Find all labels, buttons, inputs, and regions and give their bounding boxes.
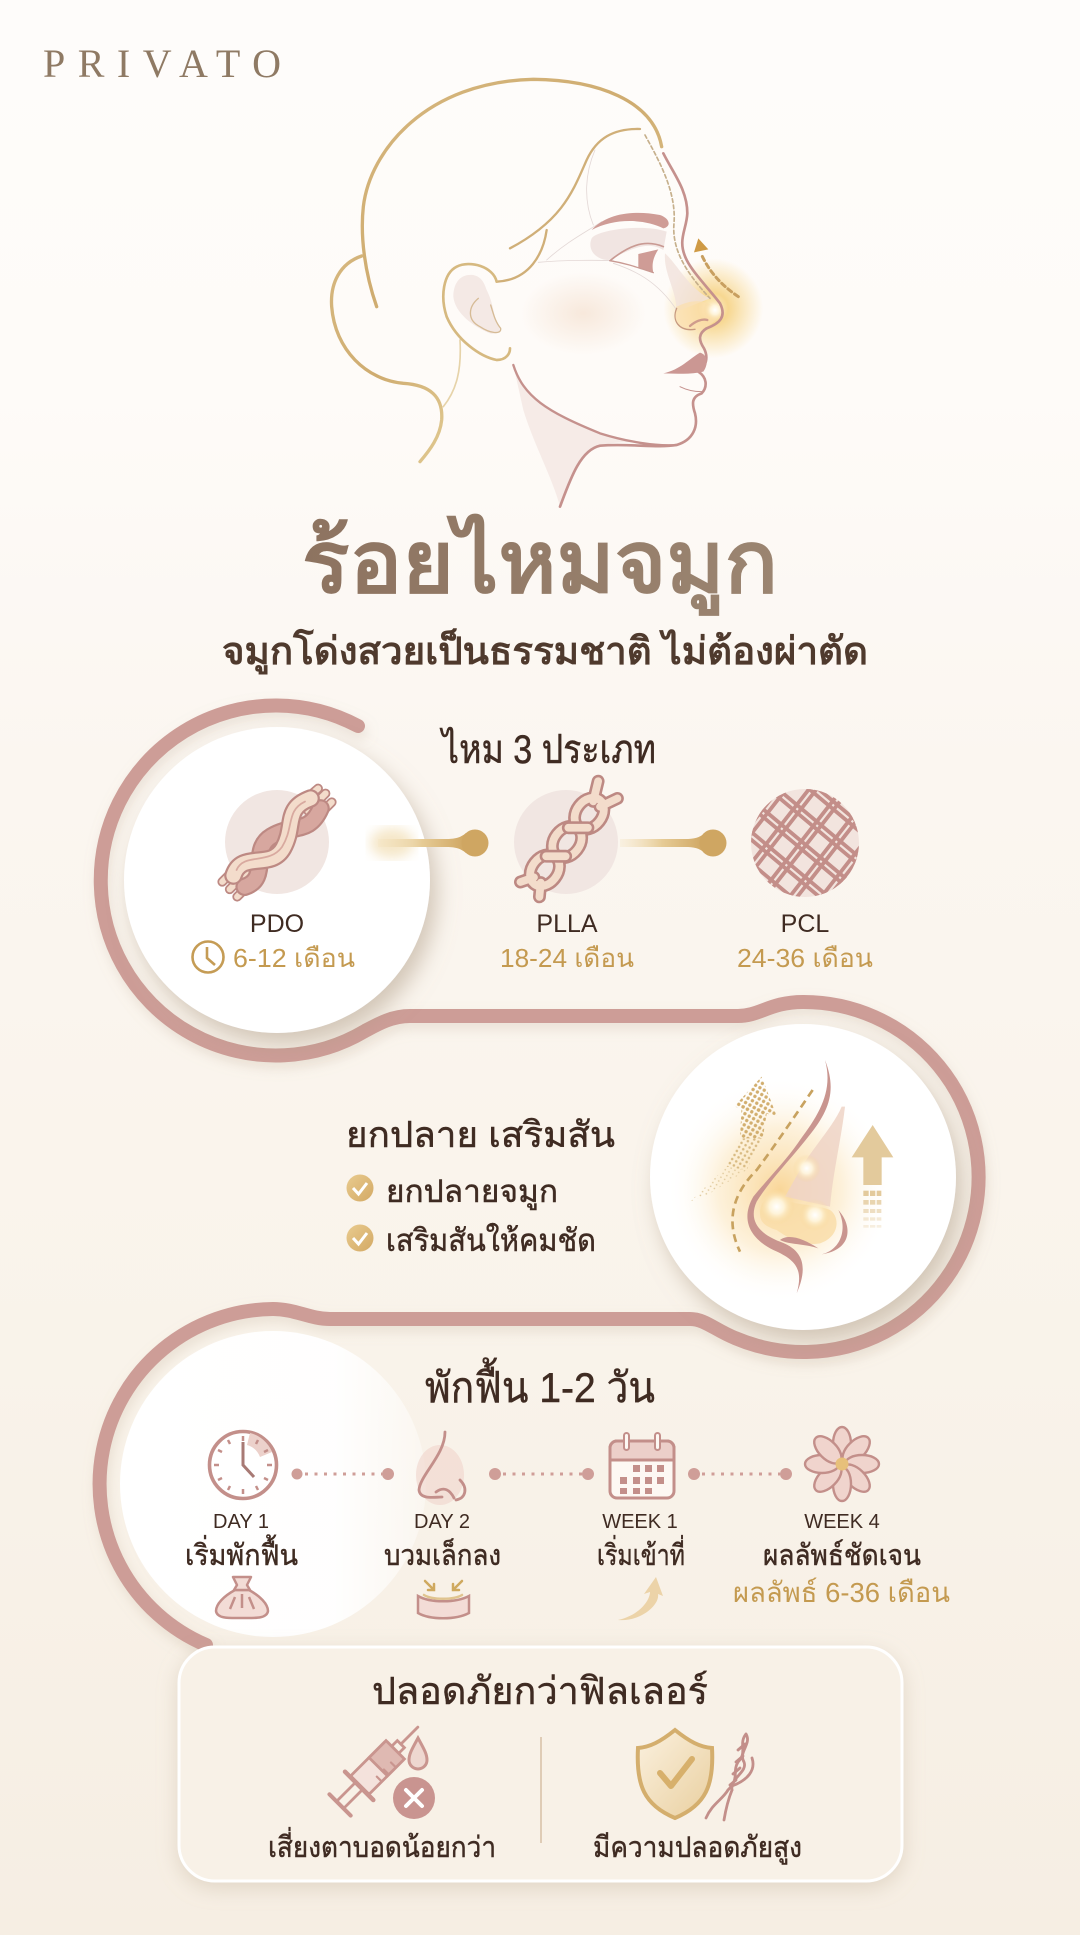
icon: nose with lift arrows: [667, 1060, 893, 1303]
panel: thread types: [124, 727, 885, 1033]
divider: [540, 1737, 542, 1843]
icon: clock day 1: [210, 1432, 276, 1498]
step 1 labels: เริ่มพักฟื้น: [185, 1534, 298, 1572]
icon: nose patch: [418, 1581, 469, 1618]
subtitle: จมูกโด่งสวยเป็นธรรมชาติ ไม่ต้องผ่าตัด: [222, 628, 868, 675]
illustration: face profile with nose glow: [331, 79, 763, 507]
ribbon: connecting path: [100, 705, 979, 1645]
PLLA label: PLLA: [536, 910, 598, 938]
check item 1: ยกปลายจมูก: [386, 1174, 558, 1210]
step 3 labels: [597, 1511, 685, 1572]
PCL label: PCL: [781, 910, 829, 938]
heading: recovery: พักฟื้น 1-2 วัน: [425, 1357, 655, 1411]
step 3 labels: WEEK 1: [602, 1511, 678, 1533]
white circle: [124, 727, 430, 1033]
connector 1: [370, 828, 488, 858]
icon: PDO twisted thread: [222, 786, 334, 897]
check item 2: เสริมสันให้คมชัด: [386, 1223, 596, 1258]
title: ร้อยไหมจมูก: [302, 513, 778, 616]
icon: PLLA chain thread: [514, 781, 618, 897]
panel: recovery timeline: [120, 1331, 950, 1637]
step 2 labels: DAY 2: [414, 1511, 470, 1533]
caption: lower blindness risk: เสี่ยงตาบอดน้อยกว่า: [268, 1827, 496, 1864]
step 4 labels: [763, 1511, 921, 1572]
white circle: [650, 1024, 956, 1330]
card: [179, 1647, 902, 1881]
logo: PRIVATO: PRIVATO: [43, 41, 281, 86]
step 1 labels: DAY 1: [213, 1511, 269, 1533]
icon: syringe with droplet: [326, 1713, 435, 1819]
step 4 result duration: ผลลัพธ์ 6-36 เดือน: [733, 1577, 950, 1608]
icon: shield with thread: [638, 1730, 753, 1820]
PCL duration: 24-36 เดือน: [737, 943, 873, 973]
timeline connector dots: [292, 1468, 792, 1480]
panel: lift tip and bridge: [346, 1024, 956, 1330]
panel: safer than filler: [179, 1647, 902, 1881]
step 1 labels: [185, 1511, 298, 1572]
caption: high safety: มีความปลอดภัยสูง: [593, 1832, 802, 1865]
PDO label: PDO: [250, 910, 304, 938]
icon: herbal compress bag: [216, 1577, 268, 1618]
icon: nose day 2: [416, 1432, 465, 1505]
icon: calendar week 1: [610, 1433, 674, 1498]
icon: flower week 4: [805, 1427, 879, 1501]
heading: safer than filler: ปลอดภัยกว่าฟิลเลอร์: [372, 1670, 708, 1713]
connector 2: [620, 830, 726, 856]
heading: thread types: ไหม 3 ประเภท: [439, 727, 656, 772]
icon: PCL mesh thread: [751, 789, 859, 897]
icon: clock: [192, 942, 224, 972]
PLLA duration: 18-24 เดือน: [500, 943, 634, 973]
step 4 labels: WEEK 4: [804, 1511, 880, 1533]
step 2 labels: [384, 1511, 501, 1572]
step 2 labels: บวมเล็กลง: [384, 1537, 501, 1572]
step 4 labels: ผลลัพธ์ชัดเจน: [763, 1539, 921, 1572]
white circle: [120, 1331, 426, 1637]
step 3 labels: เริ่มเข้าที่: [597, 1535, 685, 1572]
heading: lift and bridge: ยกปลาย เสริมสัน: [346, 1114, 615, 1155]
icon: rising arrow: [618, 1577, 663, 1620]
PDO duration: 6-12 เดือน: [233, 943, 355, 973]
